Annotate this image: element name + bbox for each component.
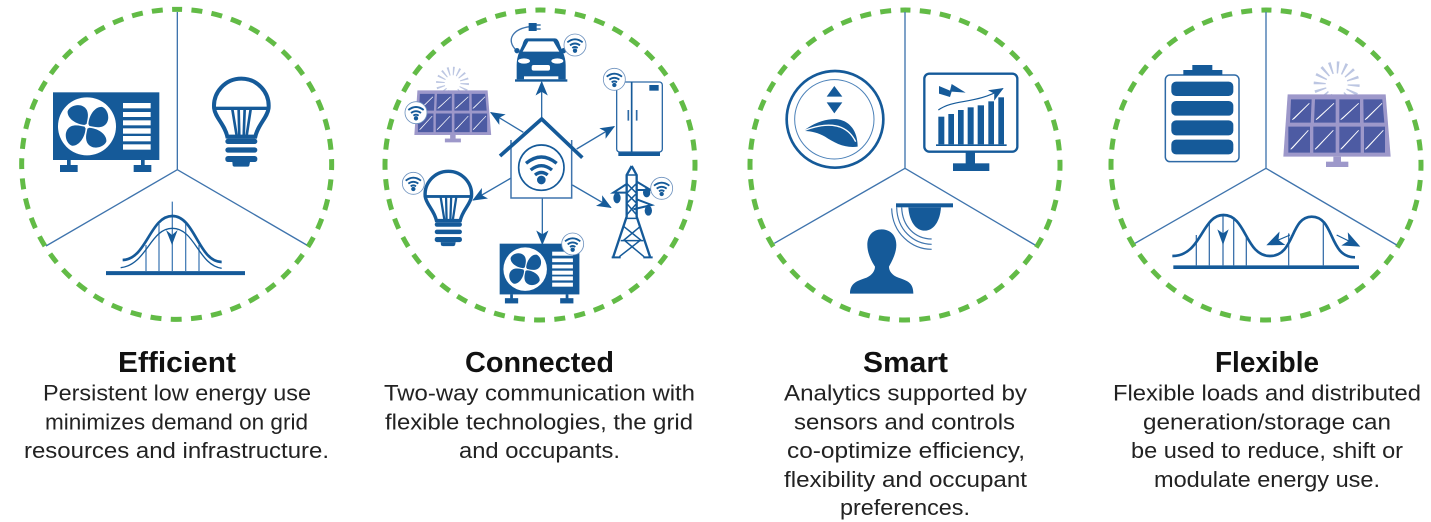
heading: Connected: Connected xyxy=(465,347,614,379)
panel: smart xyxy=(750,10,1060,520)
description: efficient xyxy=(24,380,329,463)
icon: thermostat with leaf xyxy=(787,71,883,168)
description: connected xyxy=(384,380,695,463)
icon: occupant and sensor xyxy=(850,203,953,294)
heading: Flexible: Flexible xyxy=(1215,347,1319,379)
icon: electric car xyxy=(511,24,567,82)
wifi badges xyxy=(402,34,673,255)
icon: battery xyxy=(1165,65,1239,162)
icon: light bulb xyxy=(214,79,269,167)
three-part divider xyxy=(774,12,1035,245)
description: flexible xyxy=(1113,380,1421,492)
icon: solar panel xyxy=(1283,68,1391,167)
three-part divider xyxy=(1135,12,1397,245)
description: smart: Analytics supported by xyxy=(784,380,1027,406)
connected icon circle xyxy=(385,10,695,320)
description: smart xyxy=(784,380,1027,520)
dashed circle xyxy=(1111,10,1421,320)
three-part divider xyxy=(46,12,307,246)
icon: shifted demand curve xyxy=(1172,215,1359,267)
description: smart: flexibility and occupant xyxy=(784,467,1027,492)
heading: Smart: Smart xyxy=(863,347,949,379)
description: connected: flexible technologies, the grid xyxy=(385,409,693,434)
dashed circle xyxy=(22,9,332,319)
icon: air conditioner xyxy=(53,92,159,172)
heading: Efficient: Efficient xyxy=(118,347,237,379)
description: efficient: resources and infrastructure. xyxy=(24,438,329,463)
description: smart: co-optimize efficiency, xyxy=(787,438,1025,463)
efficient icon circle xyxy=(22,9,332,319)
arrows from house xyxy=(473,82,614,244)
description: flexible: generation/storage can xyxy=(1143,409,1391,434)
description: efficient: minimizes demand on grid xyxy=(45,409,308,434)
description: flexible: modulate energy use. xyxy=(1154,467,1380,492)
icon: transmission tower xyxy=(612,166,653,257)
description: connected: and occupants. xyxy=(459,438,620,463)
description: connected: Two-way communication with xyxy=(384,380,695,406)
description: efficient: Persistent low energy use xyxy=(43,380,311,406)
icon: air conditioner xyxy=(500,244,579,303)
icon: refrigerator xyxy=(617,82,662,156)
icon: connected house xyxy=(500,119,582,198)
description: smart: sensors and controls xyxy=(794,409,1015,434)
dashed circle xyxy=(750,10,1060,320)
description: smart: preferences. xyxy=(840,495,970,520)
icon: solar panel xyxy=(414,71,491,142)
panel: efficient xyxy=(22,9,332,463)
panel: connected xyxy=(384,10,695,463)
smart icon circle xyxy=(750,10,1060,320)
icon: light bulb xyxy=(425,171,472,246)
flexible icon circle xyxy=(1111,10,1421,320)
icon: monitor with rising chart xyxy=(924,74,1017,171)
icon: demand curve xyxy=(106,202,245,273)
dashed circle xyxy=(385,10,695,320)
description: flexible: Flexible loads and distributed xyxy=(1113,380,1421,406)
panel: flexible xyxy=(1111,10,1421,492)
description: flexible: be used to reduce, shift or xyxy=(1131,438,1403,463)
